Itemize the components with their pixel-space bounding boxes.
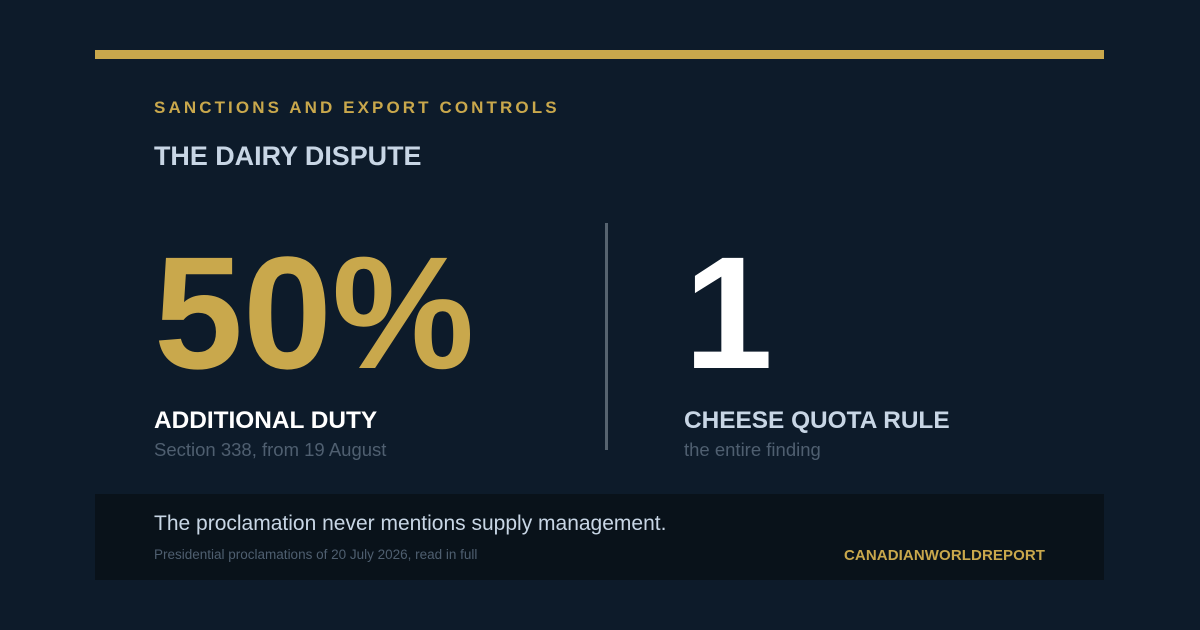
title: THE DAIRY DISPUTE <box>154 141 421 171</box>
stat label: CHEESE QUOTA RULE <box>684 407 950 434</box>
stat number: 1: 1 <box>684 223 773 402</box>
stat panel: additional duty <box>154 223 474 460</box>
source note: Presidential proclamations of 20 July 2026, read in full <box>154 547 477 562</box>
stat sublabel: the entire finding <box>684 439 821 460</box>
top accent bar <box>95 50 1104 59</box>
stat label: ADDITIONAL DUTY <box>154 407 377 434</box>
vertical divider <box>605 223 608 450</box>
stat sublabel: Section 338, from 19 August <box>154 439 386 460</box>
footer statement: The proclamation never mentions supply management. <box>154 512 666 535</box>
brand: CANADIANWORLDREPORT <box>844 547 1045 564</box>
eyebrow heading: SANCTIONS AND EXPORT CONTROLS <box>154 98 560 117</box>
stat number: 50%: 50% <box>154 223 474 402</box>
footer panel <box>95 494 1104 580</box>
stat panel: cheese quota rule <box>684 223 950 460</box>
